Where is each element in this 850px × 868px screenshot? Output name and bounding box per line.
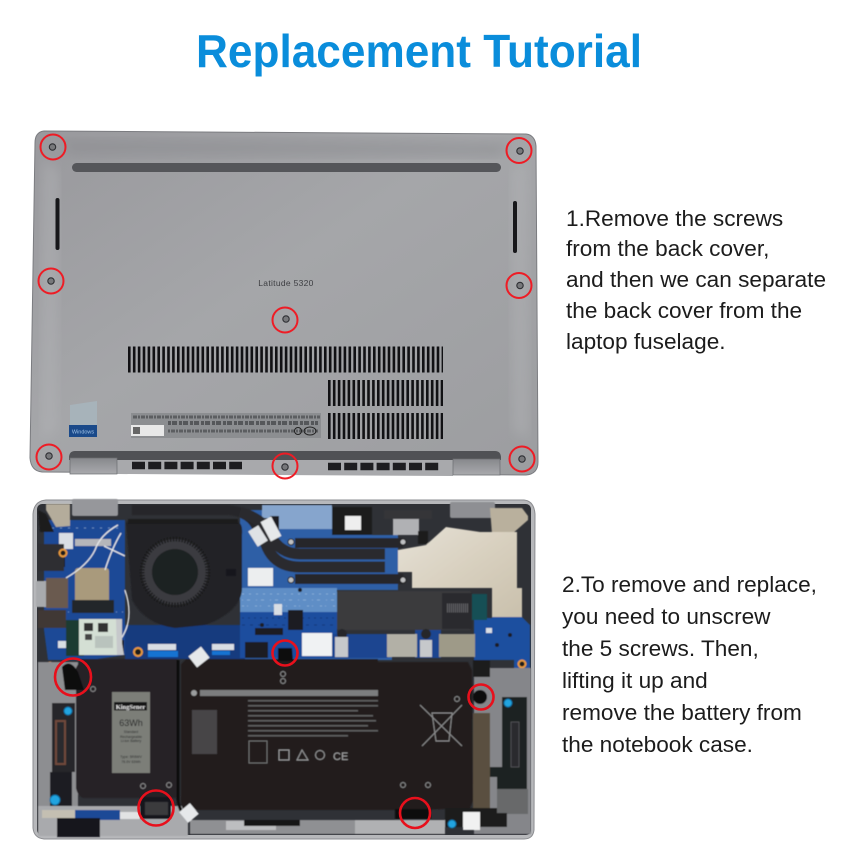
warning strip xyxy=(200,690,378,696)
SSD cover xyxy=(337,591,487,639)
right side slot xyxy=(513,201,517,253)
silver metal plate xyxy=(398,527,522,617)
battery sticker: Li-ion Battery xyxy=(121,739,142,743)
silver shield lower right xyxy=(439,634,475,657)
rear vents right xyxy=(328,463,439,470)
right battery cell xyxy=(90,659,473,818)
right board xyxy=(474,617,530,668)
back cover body xyxy=(30,131,538,475)
right hinge xyxy=(450,502,495,518)
black connector block xyxy=(332,507,372,535)
CE mark: CE xyxy=(333,751,348,763)
printed battery text xyxy=(192,700,378,754)
wifi card xyxy=(66,619,124,656)
silver shield lower centre xyxy=(387,634,417,657)
metal shield left xyxy=(75,568,109,604)
PCB components xyxy=(48,516,512,658)
white pad xyxy=(248,568,273,586)
title: Replacement Tutorial xyxy=(196,25,642,77)
screws on back cover xyxy=(46,144,525,470)
battery connector xyxy=(140,797,171,819)
fan xyxy=(142,539,208,605)
WEEE bin symbol xyxy=(420,705,462,746)
battery sticker: 76.0V 63Wh xyxy=(121,760,141,764)
left side slot xyxy=(56,198,60,250)
right hinge bracket xyxy=(490,508,528,534)
middle cooling grille xyxy=(328,380,443,406)
display cable xyxy=(384,510,432,544)
right corner parts xyxy=(445,660,531,834)
panel: laptop interior photo xyxy=(33,499,535,839)
small screw marks xyxy=(90,672,460,788)
rear hinge band xyxy=(69,451,501,476)
left blue screws xyxy=(50,707,72,805)
text block: step 1: laptop fuselage. xyxy=(566,329,726,354)
battery sticker: Type: 5R6WV xyxy=(120,755,142,759)
battery screw mounts xyxy=(62,648,487,819)
rear vents left xyxy=(132,462,242,469)
main cooling grille xyxy=(128,346,443,372)
regulatory label xyxy=(131,413,321,438)
blue ribbon tabs xyxy=(148,651,178,657)
text block: step 1: from the back cover, xyxy=(566,236,769,261)
lower cooling grille xyxy=(328,413,443,439)
text block: step 2: lifting it up and xyxy=(562,668,708,693)
left I/O ports xyxy=(36,544,68,628)
white pad lower xyxy=(302,633,332,656)
bottom edge brackets xyxy=(190,820,445,834)
motherboard left xyxy=(44,520,125,660)
bottom left parts xyxy=(38,806,188,837)
gold screw rings xyxy=(46,550,526,818)
recycle mark xyxy=(249,741,267,763)
heatsink brackets xyxy=(295,538,403,548)
battery ribbon sticker xyxy=(188,647,210,667)
regulatory symbols xyxy=(279,750,324,760)
left speaker area xyxy=(38,662,78,812)
text block: step 2 xyxy=(562,572,817,757)
windows sticker: Windows xyxy=(72,430,94,436)
text block: step 2: you need to unscrew xyxy=(562,604,771,629)
battery sticker: Standard xyxy=(124,730,138,734)
white antenna wires xyxy=(66,525,129,640)
copper heat pipes xyxy=(240,512,385,567)
left battery cell xyxy=(76,659,177,798)
text block: step 2: the notebook case. xyxy=(562,732,753,757)
silver bracket xyxy=(75,539,111,546)
left hinge bracket xyxy=(46,504,70,527)
motherboard centre xyxy=(240,510,398,660)
text block: step 2: remove the battery from xyxy=(562,700,802,725)
battery sticker: 63Wh xyxy=(119,718,143,728)
red screw markers on interior xyxy=(55,640,494,828)
small silver tabs xyxy=(335,637,432,657)
text block: step 1: and then we can separate xyxy=(566,267,826,292)
pcb texture xyxy=(44,528,528,650)
fan housing xyxy=(126,510,258,628)
battery sticker xyxy=(112,692,150,773)
right blue screws xyxy=(448,699,512,828)
text block: step 2: the 5 screws. Then, xyxy=(562,636,759,661)
sticker on cable xyxy=(261,516,281,542)
text block: step 1: 1.Remove the screws xyxy=(566,206,783,231)
left hinge xyxy=(72,499,118,516)
red screw markers on back cover xyxy=(36,134,534,478)
text block: step 1: the back cover from the xyxy=(566,298,802,323)
panel: laptop back cover photo xyxy=(30,131,538,478)
battery sticker: KingSener xyxy=(116,704,145,711)
top vent slot xyxy=(72,163,501,172)
battery sticker: Rechargeable xyxy=(120,735,142,739)
M.2 slot xyxy=(72,600,114,613)
model name: Latitude 5320 xyxy=(258,278,314,288)
chassis xyxy=(33,500,535,839)
windows sticker xyxy=(69,401,97,437)
text block: step 1 xyxy=(566,206,826,354)
black corner connector sticker xyxy=(179,803,199,823)
text block: step 2: 2.To remove and replace, xyxy=(562,572,817,597)
